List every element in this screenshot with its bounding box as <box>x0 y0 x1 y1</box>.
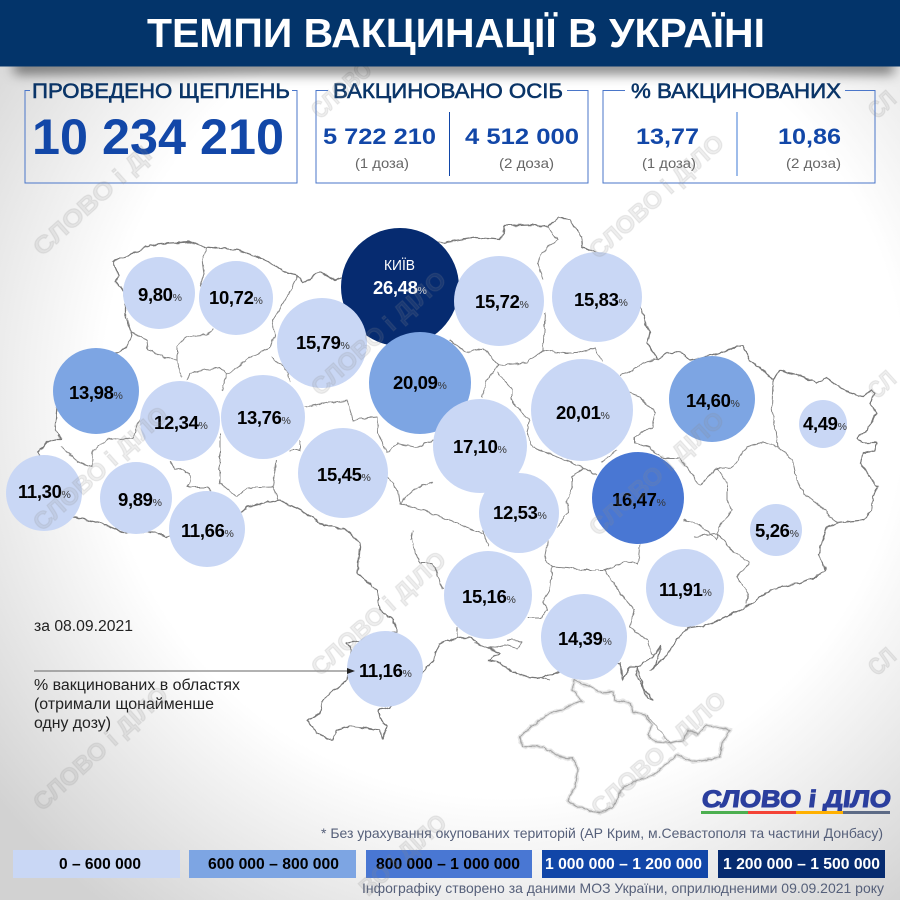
legend item 1 <box>13 850 180 878</box>
panel: vaccinated percent: (1 доза) <box>642 155 696 171</box>
circle: Dnipropetrovsk: 16,47% <box>612 489 666 510</box>
circle: Ivano-Frankivsk: 9,89% <box>118 489 162 510</box>
circle: Volyn <box>123 257 195 329</box>
circle: Chernihiv <box>454 256 544 346</box>
panel: vaccinated percent: % ВАКЦИНОВАНИХ <box>631 79 841 103</box>
circle: Odesa <box>347 631 423 707</box>
circle: Khmelnytskyi: 13,76% <box>237 407 291 428</box>
circle: Cherkasy <box>433 399 527 493</box>
panel: vaccinated percent: (2 доза) <box>786 155 841 171</box>
watermarks: СЛОВО і ДІЛО <box>28 681 174 816</box>
circle: Kharkiv: 14,60% <box>686 390 740 411</box>
circle: Zhytomyr <box>277 298 367 388</box>
legend item 5: 1 200 000 – 1 500 000 <box>723 856 880 873</box>
watermarks: СЛОВО і ДІЛО <box>306 266 452 401</box>
watermarks: СЛОВО і ДІЛО <box>584 129 730 264</box>
explanation text <box>34 677 240 732</box>
legend item 4: 1 000 000 – 1 200 000 <box>545 856 702 873</box>
circle: Lviv: 13,98% <box>69 382 123 403</box>
panel: vaccinated persons: (1 доза) <box>355 155 409 171</box>
circle: Sumy <box>552 252 642 342</box>
Crimea outline <box>520 680 730 813</box>
panel: vaccinated percent <box>603 79 875 183</box>
header banner <box>0 0 900 66</box>
circle: Vinnytsia: 15,45% <box>317 464 371 485</box>
circle: Zaporizhzhia <box>646 549 724 627</box>
circle: Chernivtsi: 11,66% <box>181 520 234 541</box>
national border <box>38 218 878 740</box>
circle: Donetsk <box>750 504 802 556</box>
explanation text: (отримали щонайменше <box>34 696 214 713</box>
panel: vaccinated percent: 10,86 <box>778 124 841 149</box>
stats panels <box>25 79 875 183</box>
legend item 2 <box>189 850 356 878</box>
circle: Kherson: 14,39% <box>558 628 612 649</box>
watermarks: СЛОВО і ДІЛО <box>584 406 730 541</box>
left notes <box>34 618 355 732</box>
circle: Kirovohrad: 12,53% <box>493 502 547 523</box>
circle: Rivne: 10,72% <box>209 287 263 308</box>
circle: Poltava <box>531 359 633 461</box>
circle: Kherson <box>541 594 627 680</box>
pointer arrow <box>34 668 355 674</box>
header shadow <box>14 60 894 74</box>
panel: vaccinated persons: ВАКЦИНОВАНО ОСІБ <box>333 79 563 103</box>
legend item 3 <box>366 850 532 878</box>
watermarks: СЛОВО і ДІ <box>28 141 157 261</box>
legend item 2: 600 000 – 800 000 <box>208 856 339 873</box>
panel: vaccinated persons: (2 доза) <box>499 155 554 171</box>
panel: vaccinated persons: 4 512 000 <box>465 124 579 149</box>
footnote: * Без урахування окупованих територій (АР Крим, м.Севастополя та частини Донбасу) <box>321 825 883 841</box>
circle: Mykolaiv: 15,16% <box>462 586 516 607</box>
source note: Інфографіку створено за даними МОЗ України, оприлюдненими 09.09.2021 року <box>362 880 884 896</box>
panel: vaccinated persons: 5 722 210 <box>323 124 436 149</box>
legend item 1: 0 – 600 000 <box>59 856 141 873</box>
legend item 3: 800 000 – 1 000 000 <box>376 856 520 873</box>
circle: Kyiv city: 26,48% <box>373 277 427 298</box>
circle: Kharkiv <box>669 356 755 442</box>
circle: Chernivtsi <box>169 491 245 567</box>
circle: Donetsk: 5,26% <box>755 520 799 541</box>
legend item 5 <box>718 850 885 878</box>
circle: Volyn: 9,80% <box>138 284 182 305</box>
circle: Zhytomyr: 15,79% <box>296 332 350 353</box>
watermarks: СЛОВО <box>306 56 378 124</box>
circle: Kyiv oblast: 20,09% <box>393 372 447 393</box>
circle: Sumy: 15,83% <box>574 289 628 310</box>
explanation text: одну дозу) <box>34 715 111 732</box>
circle: Kyiv city: КИЇВ <box>384 257 415 274</box>
panel: total doses: ПРОВЕДЕНО ЩЕПЛЕНЬ <box>32 79 290 103</box>
circle: Lviv <box>53 348 139 434</box>
explanation text: % вакцинованих в областях <box>34 677 240 694</box>
logo: СЛОВО і ДІЛО <box>700 786 893 813</box>
circle: Luhansk <box>799 400 847 448</box>
watermarks: ВО і ДІЛО <box>354 809 452 900</box>
regional circles <box>6 228 847 707</box>
circle: Odesa: 11,16% <box>359 660 412 681</box>
circle: Ternopil: 12,34% <box>154 412 208 433</box>
panel: vaccinated persons <box>316 79 588 183</box>
circle: Vinnytsia <box>298 428 388 518</box>
circle: Poltava: 20,01% <box>556 402 610 423</box>
circle: Zakarpattia: 11,30% <box>18 481 71 502</box>
legend <box>13 850 885 878</box>
watermarks: СЛОВО і ДІЛО <box>586 686 732 821</box>
circle: Zaporizhzhia: 11,91% <box>659 579 712 600</box>
circle: Ivano-Frankivsk <box>100 462 172 534</box>
circle: Kyiv oblast <box>369 332 471 434</box>
circle: Kyiv city <box>341 228 459 346</box>
oblast borders <box>62 227 837 680</box>
circle: Kirovohrad <box>479 473 559 553</box>
date note: за 08.09.2021 <box>34 618 133 635</box>
legend item 4 <box>542 850 708 878</box>
circle: Mykolaiv <box>444 551 532 639</box>
circle: Dnipropetrovsk <box>592 452 684 544</box>
panel: total doses: 10 234 210 <box>32 109 284 165</box>
circle: Zakarpattia <box>6 455 82 531</box>
watermarks: СЛОВО і ДІЛО <box>306 546 452 681</box>
watermarks: СЛОВО і ДІЛО <box>28 401 174 536</box>
circle: Cherkasy: 17,10% <box>453 436 507 457</box>
circle: Chernihiv: 15,72% <box>475 291 529 312</box>
map of Ukraine <box>38 218 878 813</box>
circle: Khmelnytskyi <box>221 375 305 459</box>
header banner: ТЕМПИ ВАКЦИНАЦІЇ В УКРАЇНІ <box>147 10 765 56</box>
circle: Rivne <box>199 261 273 335</box>
panel: total doses <box>25 79 297 183</box>
circle: Ternopil <box>140 381 220 461</box>
panel: vaccinated percent: 13,77 <box>636 124 699 149</box>
circle: Luhansk: 4,49% <box>803 413 847 434</box>
